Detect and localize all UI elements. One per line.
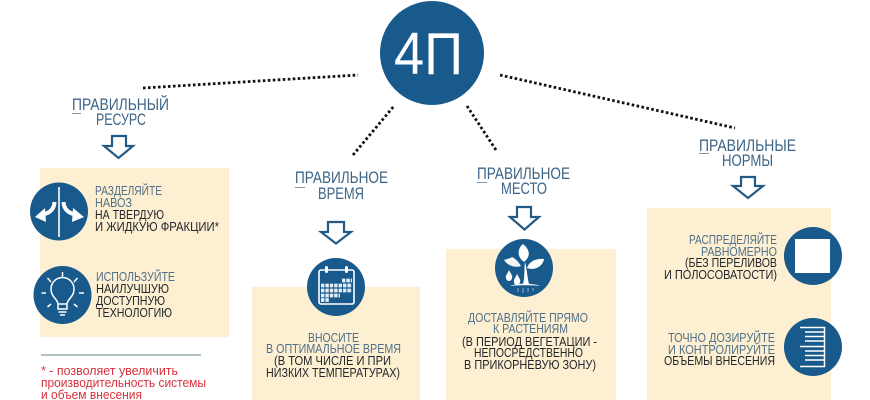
text: distribute evenly: РАСПРЕДЕЛЯЙТЕ [689,232,777,247]
text: apply at optimal time [266,330,401,380]
footnote: производительность системы [41,375,206,390]
text: dose precisely: ТОЧНО ДОЗИРУЙТЕ [668,330,775,345]
heading: right resource: ПРАВИЛЬНЫЙ [72,95,169,114]
text: use best technology: НАИЛУЧШУЮ [96,281,169,296]
panel: rate [647,208,831,400]
icon: light bulb [34,266,92,324]
text: deliver directly to plants: НЕПОСРЕДСТВЕННО [474,345,583,360]
text: deliver directly to plants: К РАСТЕНИЯМ [493,321,568,336]
arrow: down [510,207,539,230]
text: dose precisely [664,330,775,368]
arrow: down [733,177,763,198]
text: apply at optimal time: НИЗКИХ ТЕМПЕРАТУРАХ) [266,365,400,380]
icon: split arrows [30,182,88,240]
connector: to resource [143,75,358,88]
text: distribute evenly: (БЕЗ ПЕРЕЛИВОВ [685,255,777,270]
column: right rate [647,137,842,400]
text: deliver directly to plants: ДОСТАВЛЯЙТЕ ПРЯМО [468,310,588,325]
footnote [41,363,206,400]
connector: to rate [500,75,735,128]
column: right resource [30,95,229,400]
text: apply at optimal time: ВНОСИТЕ [308,330,359,345]
icon: square [784,227,842,285]
text: deliver directly to plants: В ПРИКОРНЕВУЮ ЗОНУ) [464,357,596,372]
icon: comb scale [784,318,842,376]
icon: plant with drops [495,239,553,297]
text: distribute evenly: РАВНОМЕРНО [701,244,777,259]
text: separate manure: И ЖИДКУЮ ФРАКЦИИ* [95,219,219,234]
connector: to time [353,106,394,155]
text: separate manure: НАВОЗ [95,195,132,210]
footnote: * - позволяет увеличить [41,363,178,378]
heading: right time: ПРАВИЛЬНОЕ [295,169,388,187]
heading: right rate: НОРМЫ [722,152,773,170]
panel: time [252,287,420,400]
central badge: 4P: 4П [394,21,463,87]
heading: right place [477,165,570,198]
text: distribute evenly: И ПОЛОСОВАТОСТИ) [664,267,777,282]
heading: right time [295,169,388,203]
heading: right place: МЕСТО [501,180,547,198]
text: separate manure: РАЗДЕЛЯЙТЕ [95,183,162,198]
central badge: 4P [380,1,484,105]
text: use best technology: ИСПОЛЬЗУЙТЕ [96,269,175,284]
arrow: down [321,222,351,244]
connector: to place [467,106,496,150]
icon: calendar [307,258,365,316]
column: right time [252,169,420,400]
text: use best technology [96,269,175,320]
text: deliver directly to plants: (В ПЕРИОД ВЕГЕТАЦИИ - [462,334,597,349]
text: distribute evenly [664,232,777,282]
heading: right rate [699,137,796,170]
text: use best technology: ДОСТУПНУЮ [96,293,165,308]
panel: resource [40,168,229,337]
heading: right time: ВРЕМЯ [318,185,364,203]
heading: right place: ПРАВИЛЬНОЕ [477,165,570,183]
arrow: down [104,136,133,158]
heading: right resource: РЕСУРС [96,111,146,129]
text: deliver directly to plants [462,310,597,372]
text: separate manure [95,183,219,234]
heading: right resource [72,95,169,129]
heading: right rate: ПРАВИЛЬНЫЕ [699,137,796,155]
column: right place [446,165,616,400]
text: use best technology: ТЕХНОЛОГИЮ [96,305,172,320]
text: apply at optimal time: (В ТОМ ЧИСЛЕ И ПРИ [274,353,391,368]
panel: place [446,249,616,400]
text: separate manure: НА ТВЕРДУЮ [95,207,164,222]
text: dose precisely: ОБЪЕМЫ ВНЕСЕНИЯ [664,353,775,368]
text: apply at optimal time: В ОПТИМАЛЬНОЕ ВРЕМЯ [266,341,401,356]
text: dose precisely: И КОНТРОЛИРУЙТЕ [668,342,775,357]
